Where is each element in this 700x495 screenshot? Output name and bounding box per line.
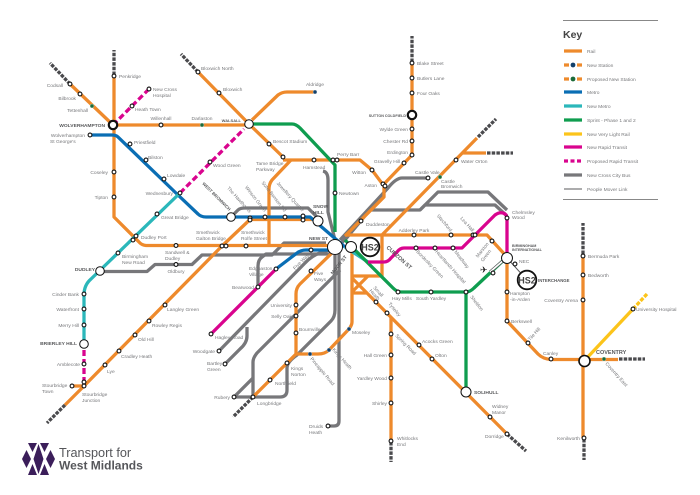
- station labels: Moseley: [352, 330, 371, 336]
- line: new metro: [84, 193, 368, 344]
- rotated labels: SNOW: [313, 204, 329, 210]
- rotated labels: Soho Benson Rd: [260, 180, 287, 213]
- key: cross city bus: New Cross City Bus: [587, 173, 631, 179]
- lines: rail: [65, 63, 618, 441]
- logo: Transport for West Midlands: West Midlands: [59, 458, 143, 472]
- station labels: INTERCHANGE: [538, 278, 570, 283]
- station labels: Erdington: [387, 150, 408, 156]
- station labels: Castle Vale: [415, 170, 440, 176]
- station labels: BIRMINGHAM: [512, 244, 536, 248]
- key: proposed new station: Proposed New Station: [587, 77, 636, 83]
- key: sprint: Sprint - Phase 1 and 2: [587, 118, 636, 124]
- HS2 labels: HS2: [361, 242, 379, 252]
- key: rail: [564, 49, 595, 55]
- station labels: Edgbaston: [249, 266, 273, 272]
- key: proposed rapid transit: [564, 159, 639, 165]
- station labels: Duddeston: [366, 222, 390, 228]
- station labels: Aston: [364, 183, 377, 189]
- station labels: End: [397, 442, 406, 448]
- proposed extensions: [47, 36, 645, 462]
- network map: [40, 36, 676, 462]
- rotated labels: Marston: [475, 241, 491, 259]
- station labels: Longbridge: [257, 401, 282, 407]
- station labels: Gravelly Hill: [374, 159, 400, 165]
- rotated labels: WEST BROMWICH: [201, 181, 232, 212]
- station labels: Five: [314, 271, 324, 277]
- rotated labels: Stechford: [435, 213, 453, 233]
- rotated labels: Jewellery Quarter: [275, 181, 305, 214]
- station labels: Tettenhall: [67, 108, 88, 114]
- rotated labels: Bordesley Green: [415, 249, 445, 280]
- station labels: SUTTON COLDFIELD: [369, 114, 406, 118]
- station labels: Bloxwich: [223, 87, 243, 93]
- station labels: Ways: [314, 277, 327, 283]
- station labels: Yardley Wood: [357, 376, 387, 382]
- station labels: Newtown: [339, 191, 359, 197]
- station labels: WALSALL: [222, 118, 242, 123]
- station labels: Great Bridge: [161, 215, 189, 221]
- key: proposed rapid transit: Proposed Rapid Transit: [587, 159, 639, 165]
- station labels: Amblecote: [57, 362, 80, 368]
- station labels: Bournville: [299, 327, 321, 333]
- station labels: Smethwick: [241, 230, 265, 236]
- station labels: Chelmsley: [512, 210, 535, 216]
- station labels: University Hospital: [636, 307, 676, 313]
- station labels: SOLIHULL: [474, 390, 498, 396]
- rotated labels: Kings Heath: [331, 347, 353, 371]
- station labels: Four Oaks: [417, 91, 440, 97]
- line: very light rail: [585, 309, 633, 360]
- station labels: Birmingham: [122, 254, 148, 260]
- station labels: University: [271, 303, 293, 309]
- logo text: Transport for: [59, 446, 132, 460]
- rotated labels: Green: [480, 249, 493, 263]
- station labels: Witton: [352, 170, 366, 176]
- station labels: Bartley: [207, 361, 223, 367]
- icon: airport: ✈: [480, 266, 488, 276]
- new stations: [90, 90, 606, 361]
- station labels: Hampton: [510, 291, 530, 297]
- station labels: Oldbury: [167, 269, 185, 275]
- station labels: Shirley: [372, 401, 388, 407]
- key: very light rail: [564, 132, 630, 138]
- station labels: Dorridge: [485, 434, 504, 440]
- key: sprint: [564, 118, 636, 124]
- station labels: Castle: [441, 179, 455, 185]
- station labels: Darlaston: [192, 116, 213, 122]
- station labels: Aldridge: [306, 82, 324, 88]
- station labels: Bilbrook: [58, 96, 77, 102]
- HS2 labels: [361, 242, 536, 286]
- station labels: Bermuda Park: [588, 254, 620, 260]
- station labels: Stourbridge: [82, 392, 108, 398]
- key: new station: [564, 63, 614, 69]
- station labels: Butlers Lane: [417, 76, 445, 82]
- station labels: Waterfront: [56, 307, 80, 313]
- station labels: Bescot Stadium: [273, 139, 307, 145]
- station labels: NEC: [519, 259, 530, 265]
- rotated labels: NEW ST: [309, 236, 328, 242]
- station labels: Lye: [107, 369, 115, 375]
- rotated labels: Coventry East: [604, 361, 629, 389]
- key: very light rail: New Very Light Rail: [587, 132, 630, 138]
- station labels: Dudley: [165, 256, 181, 262]
- station labels: Old Hill: [138, 337, 154, 343]
- key: rail: Rail: [587, 49, 595, 55]
- rotated labels: Pineapple Road: [308, 356, 336, 387]
- station labels: Tame Bridge: [256, 161, 284, 167]
- interchange stations: [80, 111, 590, 397]
- rotated labels: Tile Hill: [527, 327, 542, 342]
- rotated labels: Heartlands Hospital: [434, 249, 467, 285]
- station labels: Kings: [291, 366, 304, 372]
- station labels: Willenhall: [151, 116, 171, 122]
- station labels: Wood Green: [213, 163, 241, 169]
- station labels: [40, 61, 676, 448]
- station labels: Merry Hill: [58, 323, 79, 329]
- station labels: Green: [207, 367, 221, 373]
- station labels: St George's: [50, 139, 76, 145]
- lines: cross city bus: [100, 171, 507, 426]
- rotated labels: HILL: [313, 210, 324, 216]
- station labels: Bromwich: [441, 184, 463, 190]
- station labels: Cinder Bank: [52, 292, 80, 298]
- line: sprint: [249, 124, 507, 392]
- station labels: Perry Barr: [337, 152, 360, 158]
- station labels: Penkridge: [119, 74, 141, 80]
- station labels: Rubery: [214, 395, 231, 401]
- station labels: Wylde Green: [380, 127, 408, 133]
- station labels: INTERNATIONAL: [512, 248, 543, 252]
- station labels: Rolfe Street: [241, 236, 267, 242]
- station labels: Coventry Arena: [544, 298, 578, 304]
- station labels: Bedworth: [588, 273, 609, 279]
- station labels: Hall Green: [364, 353, 387, 359]
- station labels: Hay Mills: [392, 296, 412, 302]
- station labels: Druids: [309, 424, 324, 430]
- station labels: Heath Town: [135, 107, 161, 113]
- key: new station: New Station: [587, 63, 614, 69]
- rotated labels: MOOR ST: [330, 255, 349, 276]
- station labels: Hagley Road: [215, 335, 244, 341]
- station labels: Selly Oak: [271, 314, 293, 320]
- station labels: Wood: [512, 215, 525, 221]
- rotated labels: Sheldon: [468, 295, 484, 313]
- key: metro: [564, 90, 600, 96]
- key: people mover: [564, 187, 628, 193]
- key: proposed new station: [564, 77, 636, 83]
- stations: [68, 61, 635, 443]
- line: proposed rapid transit: [84, 89, 244, 383]
- station labels: Sandwell &: [165, 250, 190, 256]
- station labels: Chester Rd: [383, 139, 408, 145]
- station labels: Norton: [291, 372, 306, 378]
- key: rapid transit: New Rapid Transit: [587, 145, 628, 151]
- station labels: Tipton: [95, 195, 108, 201]
- rotated labels: Meadway: [452, 250, 470, 270]
- rotated labels: Lea Hall: [459, 216, 475, 233]
- key heading: Key: [563, 29, 582, 41]
- rotated labels: The Hawthorns: [225, 186, 252, 215]
- station labels: Berkswell: [511, 319, 532, 325]
- station labels: Northfield: [275, 381, 296, 387]
- station labels: Dudley Port: [141, 235, 167, 241]
- station labels: COVENTRY: [596, 350, 627, 356]
- station labels: Adderley Park: [399, 228, 430, 234]
- station labels: Wednesbury: [146, 191, 174, 197]
- station labels: Kenilworth: [557, 436, 580, 442]
- rotated labels: CURZON ST: [385, 245, 413, 271]
- rotated labels: Winson Green: [243, 185, 267, 213]
- key: metro: Metro: [587, 90, 600, 96]
- station labels: New Cross: [153, 87, 177, 93]
- station labels: Woodgate: [193, 349, 215, 355]
- station labels: Town: [42, 389, 54, 395]
- line: rapid transit: [211, 213, 507, 334]
- station labels: Hamstead: [303, 165, 326, 171]
- rotated labels: Heath: [368, 288, 381, 302]
- station labels: Codsall: [47, 83, 63, 89]
- station labels: Acocks Green: [422, 339, 453, 345]
- station labels: Junction: [82, 398, 100, 404]
- station labels: Coseley: [90, 170, 109, 176]
- station labels: -in-Arden: [510, 297, 530, 303]
- lines: metro: [90, 135, 345, 269]
- station labels: Rowley Regis: [152, 323, 182, 329]
- station labels: Langley Green: [167, 307, 199, 313]
- station labels: Lowdale: [167, 173, 185, 179]
- rotated labels: Small: [372, 285, 384, 298]
- station labels: Village: [249, 272, 264, 278]
- station labels: Wolverhampton: [51, 133, 85, 139]
- station labels: Hospital: [153, 93, 171, 99]
- station labels: Priestfield: [134, 140, 156, 146]
- panel: key: [563, 20, 658, 200]
- station labels: Bloxwich North: [201, 66, 234, 72]
- station labels: BRIERLEY HILL: [40, 341, 77, 347]
- station labels: Bearwood: [232, 285, 254, 291]
- station labels: Manor: [492, 410, 506, 416]
- station labels: South Yardley: [416, 296, 447, 302]
- station labels: WOLVERHAMPTON: [59, 123, 105, 129]
- rotated labels: [201, 180, 629, 389]
- rotated labels: Spring Road: [394, 333, 417, 357]
- station labels: Blake Street: [417, 61, 444, 67]
- station labels: Canley: [543, 351, 559, 357]
- station labels: Parkway: [256, 167, 275, 173]
- station labels: Cradley Heath: [121, 354, 153, 360]
- station labels: Olton: [435, 353, 447, 359]
- rotated labels: Tyseley: [386, 301, 402, 318]
- HS2 labels: HS2: [518, 276, 536, 286]
- station labels: Smethwick: [196, 230, 220, 236]
- key: new metro: [564, 104, 611, 110]
- icon: diamond mark: [22, 443, 55, 475]
- rotated labels: Five Ways: [292, 251, 313, 271]
- station labels: Whitlocks: [397, 436, 418, 442]
- key: cross city bus: [564, 173, 631, 179]
- station labels: New Road: [122, 260, 145, 266]
- people mover: [490, 258, 527, 280]
- station labels: Water Orton: [461, 159, 488, 165]
- station labels: DUDLEY: [75, 267, 96, 273]
- station labels: Heath: [309, 430, 322, 436]
- station labels: Widney: [492, 404, 509, 410]
- logo: Transport for West Midlands: [22, 443, 143, 475]
- key: new metro: New Metro: [587, 104, 611, 110]
- station labels: Bilston: [148, 155, 163, 161]
- station labels: Stourbridge: [42, 383, 68, 389]
- key: people mover: People Mover Link: [587, 187, 628, 193]
- key: rapid transit: [564, 145, 628, 151]
- station labels: Galton Bridge: [196, 236, 226, 242]
